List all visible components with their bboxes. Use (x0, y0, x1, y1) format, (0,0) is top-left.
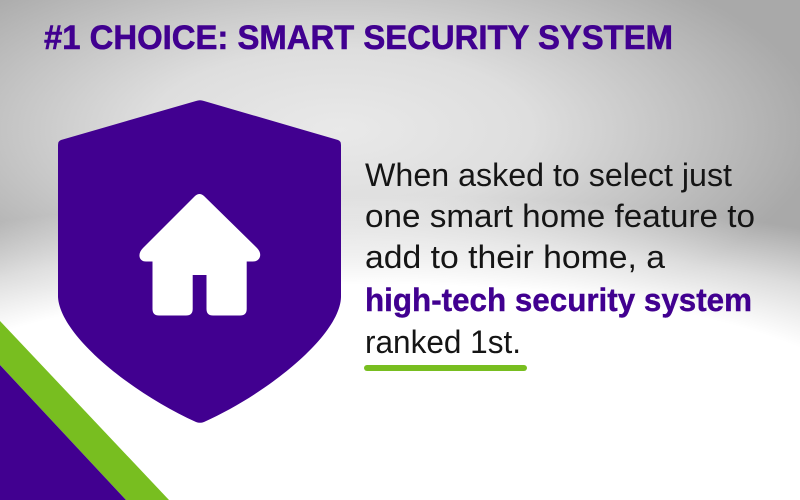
body text: ranked 1st. (365, 324, 521, 360)
house (139, 194, 260, 316)
title: #1 CHOICE: SMART SECURITY SYSTEM (44, 19, 673, 57)
body text: When asked to select just (365, 157, 732, 193)
body text: add to their home, a (365, 239, 665, 275)
body text (365, 157, 755, 360)
icon: shield with house (58, 100, 341, 423)
shield (58, 100, 341, 423)
corner: purple triangle (0, 365, 126, 500)
corner: green diagonal band (0, 321, 169, 500)
body text: high-tech security system (365, 282, 752, 318)
green underline (364, 365, 527, 371)
body text: one smart home feature to (365, 198, 755, 234)
